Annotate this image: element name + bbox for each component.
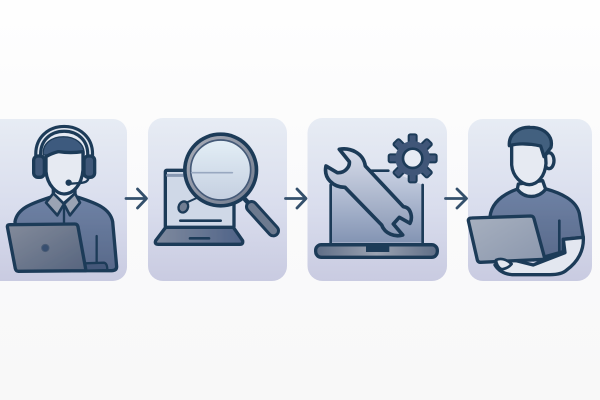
panel: support agent bbox=[0, 119, 127, 281]
arrow: step one to two bbox=[126, 189, 146, 208]
panel: repair bbox=[308, 118, 447, 281]
icon: user holding laptop bbox=[468, 127, 583, 275]
panel: satisfied user bbox=[468, 119, 592, 281]
arrow: step two to three bbox=[286, 189, 306, 208]
icon: magnifying glass over laptop bbox=[155, 132, 273, 244]
arrow: step three to four bbox=[446, 189, 466, 208]
icon: wrench gear and laptop bbox=[316, 134, 437, 257]
panel: diagnosis bbox=[148, 118, 287, 281]
icon: gear bbox=[389, 134, 437, 182]
icon: support agent with headset and laptop bbox=[7, 129, 117, 271]
